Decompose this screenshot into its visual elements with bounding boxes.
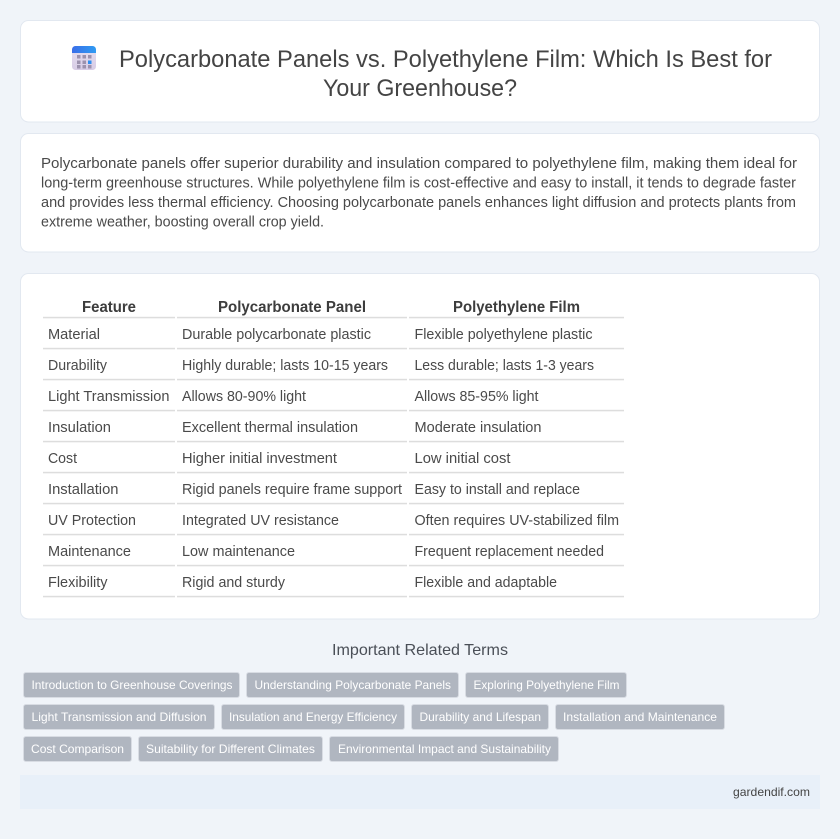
title: Polycarbonate Panels vs. Polyethylene Film: Which Is Best for — [119, 46, 772, 73]
row: light transmission: Allows 80-90% light — [182, 389, 306, 405]
tag: light — [24, 704, 214, 730]
tag: polyethylene: Exploring Polyethylene Film — [474, 678, 620, 692]
row: insulation — [43, 420, 624, 442]
table header: Polycarbonate Panel — [218, 299, 366, 316]
row: material: Durable polycarbonate plastic — [182, 327, 371, 343]
row: durability — [43, 358, 624, 380]
row: maintenance — [43, 544, 624, 566]
row: installation: Easy to install and replace — [414, 482, 580, 498]
tag: introduction: Introduction to Greenhouse Coverings — [32, 678, 232, 692]
row: installation — [43, 482, 624, 504]
panel: introduction — [20, 134, 820, 252]
tag: polycarbonate: Understanding Polycarbonate Panels — [254, 678, 451, 692]
tag: installation — [556, 704, 724, 730]
row: light transmission: Allows 85-95% light — [414, 389, 538, 405]
row: insulation: Moderate insulation — [414, 420, 542, 436]
tag: climates: Suitability for Different Climates — [146, 742, 315, 756]
row: durability: Less durable; lasts 1-3 years — [414, 358, 594, 374]
row: durability: Highly durable; lasts 10-15 years — [182, 358, 388, 374]
tag: cost: Cost Comparison — [31, 742, 124, 756]
row: flexibility: Rigid and sturdy — [182, 575, 286, 591]
tag: polyethylene — [466, 672, 626, 698]
row: insulation: Insulation — [48, 420, 111, 436]
tag: environment — [330, 736, 558, 762]
row: maintenance: Frequent replacement needed — [414, 544, 604, 560]
row: material: Material — [48, 327, 100, 343]
tag: climates — [138, 736, 322, 762]
text block: introduction paragraph: extreme weather, boosting overall crop yield. — [41, 214, 324, 230]
row: insulation: Excellent thermal insulation — [182, 420, 358, 436]
title: Your Greenhouse? — [323, 75, 517, 102]
tag: introduction — [24, 672, 240, 698]
tag: durability: Durability and Lifespan — [420, 710, 541, 724]
title — [119, 46, 772, 102]
row: cost: Higher initial investment — [182, 451, 337, 467]
text block: introduction paragraph — [41, 156, 797, 230]
row: installation: Installation — [48, 482, 118, 498]
row: maintenance: Low maintenance — [182, 544, 295, 560]
text block: introduction paragraph: and provides less thermal efficiency. Choosing polycarbonate panels enhances light diffusion and protects plants from — [41, 195, 796, 211]
row: light transmission: Light Transmission — [48, 389, 170, 405]
row: cost: Cost — [48, 451, 77, 467]
row: flexibility — [43, 575, 624, 597]
tag: cost — [24, 736, 132, 762]
row: cost: Low initial cost — [414, 451, 510, 467]
row: UV protection — [43, 513, 624, 535]
text block: introduction paragraph: long-term greenhouse structures. While polyethylene film is cost-effective and easy to install, it tends to degrade faster — [41, 176, 796, 192]
tag: light: Light Transmission and Diffusion — [32, 710, 207, 724]
table header — [43, 299, 624, 318]
row: light transmission — [43, 389, 624, 411]
table header: Polyethylene Film — [453, 299, 580, 316]
heading: important related terms: Important Related Terms — [332, 642, 508, 659]
table header: Feature — [82, 299, 136, 316]
tag group: related terms — [24, 672, 724, 762]
text block: introduction paragraph: Polycarbonate panels offer superior durability and insulation compared to polyethylene film, making them ideal for — [41, 156, 797, 172]
panel: title card — [20, 20, 820, 122]
footer — [20, 775, 820, 809]
row: UV protection: Integrated UV resistance — [182, 513, 339, 529]
footer text: source: gardendif.com — [733, 785, 810, 799]
row: UV protection: Often requires UV-stabilized film — [414, 513, 619, 529]
row: material — [43, 327, 624, 349]
panel: comparison table — [20, 274, 820, 619]
tag: environment: Environmental Impact and Sustainability — [338, 742, 551, 756]
tag: durability — [412, 704, 548, 730]
row: maintenance: Maintenance — [48, 544, 131, 560]
row: flexibility: Flexibility — [48, 575, 108, 591]
row: UV protection: UV Protection — [48, 513, 136, 529]
tag: insulation: Insulation and Energy Efficiency — [229, 710, 397, 724]
tag: installation: Installation and Maintenance — [563, 710, 717, 724]
tag: insulation — [222, 704, 404, 730]
row: cost — [43, 451, 624, 473]
tag: polycarbonate — [246, 672, 458, 698]
row: durability: Durability — [48, 358, 108, 374]
icon: calendar — [72, 46, 96, 70]
row: material: Flexible polyethylene plastic — [414, 327, 592, 343]
row: flexibility: Flexible and adaptable — [414, 575, 557, 591]
row: installation: Rigid panels require frame support — [182, 482, 402, 498]
